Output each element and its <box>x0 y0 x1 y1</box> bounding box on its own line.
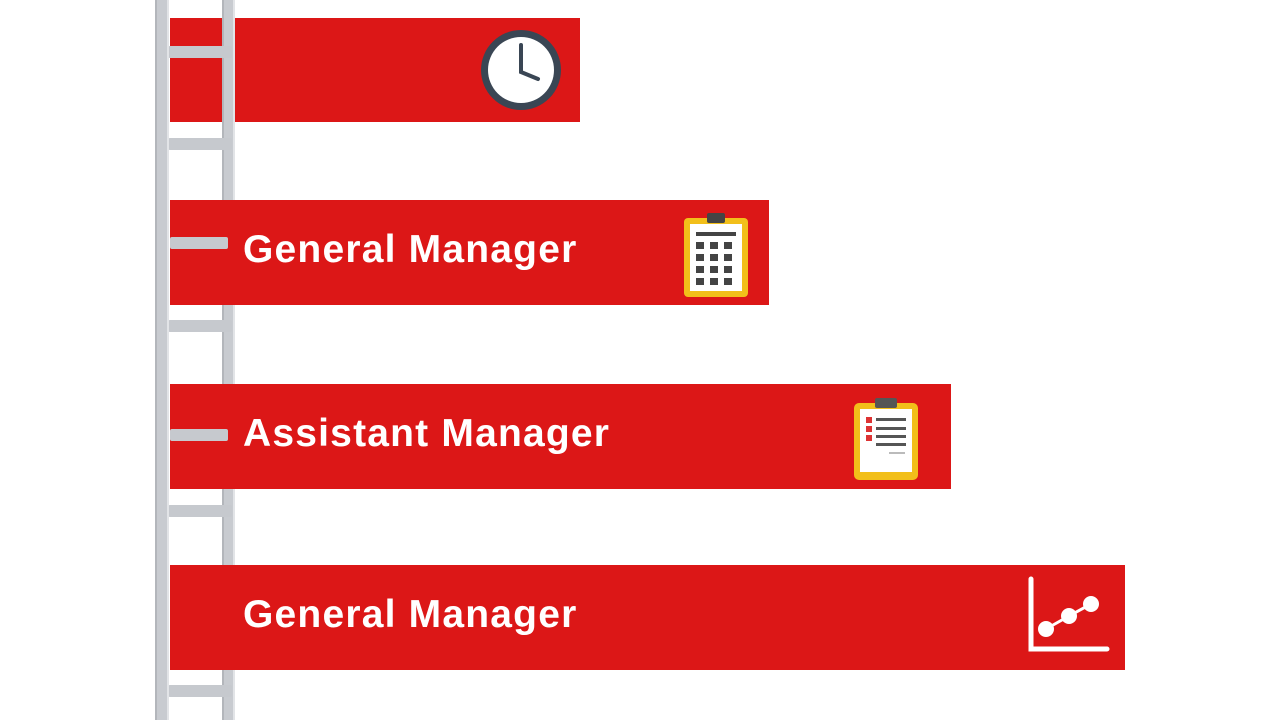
ladder rungs behind bars <box>169 138 224 697</box>
label: Assistant Manager: Assistant Manager <box>243 412 610 455</box>
top rung <box>168 46 232 58</box>
bar 4: General Manager <box>170 565 1125 670</box>
rung <box>170 429 228 441</box>
label: General Manager (bottom): General Manager <box>243 593 577 636</box>
rung <box>170 237 228 249</box>
bar 2: General Manager <box>170 200 769 305</box>
icon: checklist clipboard <box>854 398 918 480</box>
bar 3: Assistant Manager <box>170 384 951 489</box>
bar 1: clock <box>170 18 580 122</box>
ladder right rail (behind bars) <box>222 0 235 720</box>
icon: clock <box>481 30 561 110</box>
icon: line chart <box>1028 576 1110 652</box>
right rail segment over top bar <box>222 18 235 122</box>
ladder left rail <box>155 0 169 720</box>
icon: calendar clipboard <box>684 213 748 297</box>
label: General Manager: General Manager <box>243 228 577 271</box>
